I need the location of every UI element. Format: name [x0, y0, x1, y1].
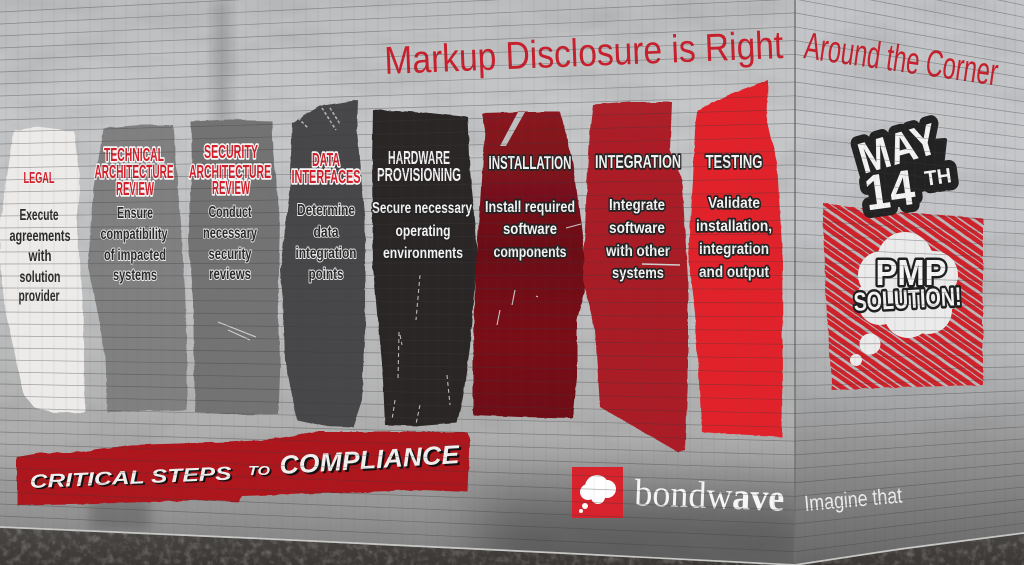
panel: technical architecture review — [88, 125, 187, 412]
paint strip — [372, 110, 478, 426]
heading: TECHNICAL — [104, 145, 164, 165]
description: Determine — [297, 202, 355, 219]
heading — [189, 142, 271, 198]
badge text — [853, 252, 962, 317]
heading: TESTING — [706, 152, 762, 172]
panel: integration — [583, 102, 688, 452]
left wall — [0, 0, 795, 565]
description: installation, — [696, 218, 772, 235]
description: Integrate — [609, 197, 665, 214]
panel: testing — [688, 80, 783, 437]
paint scratch — [642, 264, 680, 265]
heading: REVIEW — [116, 179, 154, 199]
badge: May 14th — [853, 114, 953, 221]
description: Validate — [708, 195, 760, 212]
panel: legal — [0, 127, 85, 413]
paint tear — [500, 112, 525, 146]
description: systems — [113, 267, 157, 284]
heading: DATA — [312, 150, 340, 170]
description: security — [208, 246, 252, 263]
description: provider — [18, 288, 60, 305]
paint scratches — [392, 275, 450, 424]
building corner line — [794, 0, 796, 563]
description — [10, 207, 71, 305]
heading — [377, 148, 461, 185]
heading: PROVISIONING — [377, 165, 461, 185]
black sticker outline: 14 — [861, 159, 918, 221]
description: operating — [396, 223, 450, 240]
description: data — [314, 224, 339, 241]
badge text: SOLUTION! — [853, 281, 962, 317]
description — [296, 202, 356, 283]
description: systems — [612, 265, 664, 282]
paint strip — [0, 127, 85, 413]
description — [203, 204, 257, 283]
thought cloud — [857, 232, 960, 338]
black sticker outline — [853, 114, 953, 221]
description: agreements — [10, 228, 71, 245]
paint scratches — [497, 224, 581, 325]
description: environments — [383, 245, 463, 262]
banner text: COMPLIANCE — [279, 439, 461, 480]
heading: ARCHITECTURE — [189, 162, 271, 182]
description: components — [494, 244, 567, 261]
banner text: CRITICAL STEPS — [29, 464, 232, 493]
curb at base of wall — [0, 526, 1024, 565]
heading: INTERFACES — [292, 167, 360, 187]
cloud dots — [850, 334, 880, 366]
curb texture — [0, 528, 1024, 565]
description — [696, 195, 772, 281]
wordmark: bondwave — [634, 472, 785, 520]
red paint banner — [17, 432, 470, 505]
banner text — [29, 439, 461, 493]
heading — [292, 150, 360, 187]
description: Install required — [485, 199, 575, 216]
heading — [94, 145, 174, 199]
badge: PMP solution scribble — [822, 203, 984, 390]
paint strip — [280, 100, 365, 427]
heading: LEGAL — [24, 170, 55, 187]
heading: INSTALLATION — [488, 153, 572, 173]
curb highlight — [0, 527, 1024, 565]
description — [605, 197, 670, 282]
th: TH — [923, 164, 953, 191]
14: 14 — [861, 159, 918, 221]
description: necessary — [203, 225, 257, 242]
paint strip — [688, 80, 783, 437]
description: integration — [296, 245, 356, 262]
panel: security architecture review — [188, 120, 280, 415]
description: points — [308, 266, 344, 283]
paint scratches — [218, 322, 256, 340]
description: with — [28, 248, 52, 265]
description: Execute — [20, 207, 59, 224]
red scribble square — [822, 203, 984, 390]
logo icon square — [572, 467, 623, 518]
description: of impacted — [104, 247, 166, 264]
tagline: Imagine that — [803, 483, 903, 516]
logo: bondwave — [572, 467, 903, 520]
paint scratches — [298, 108, 340, 130]
heading: HARDWARE — [388, 148, 450, 168]
description: Ensure — [117, 205, 153, 222]
description — [100, 205, 168, 284]
banner: critical steps to compliance — [17, 432, 470, 505]
heading: REVIEW — [212, 178, 250, 198]
panel: data interfaces — [280, 100, 365, 427]
right wall — [795, 0, 1024, 565]
description: solution — [20, 269, 60, 286]
description — [485, 199, 575, 261]
panel: hardware provisioning — [372, 110, 478, 426]
paint strip — [88, 125, 187, 412]
paint strip — [583, 102, 688, 452]
paint strip — [188, 120, 280, 415]
black sticker outline: MAY — [853, 114, 943, 184]
paint strip — [473, 112, 587, 418]
title: left wall part: Markup Disclosure is Right — [384, 24, 784, 83]
heading: ARCHITECTURE — [94, 162, 174, 182]
May: MAY — [853, 114, 943, 184]
heading: INTEGRATION — [595, 152, 681, 172]
description: reviews — [209, 266, 251, 283]
badge text: PMP — [876, 252, 946, 293]
black sticker outline: TH — [923, 164, 953, 191]
description: Conduct — [208, 204, 252, 221]
description: integration — [699, 241, 769, 258]
banner text: TO — [248, 463, 270, 478]
description: and output — [699, 264, 770, 281]
panel: installation — [473, 112, 587, 418]
description: Secure necessary — [372, 200, 472, 217]
description: software — [503, 221, 557, 238]
title — [384, 24, 1001, 94]
curb surface — [0, 527, 1024, 565]
description: software — [609, 220, 665, 237]
description — [372, 200, 472, 262]
heading: SECURITY — [204, 142, 258, 162]
description: compatibility — [100, 226, 168, 243]
description: with other — [605, 243, 670, 260]
